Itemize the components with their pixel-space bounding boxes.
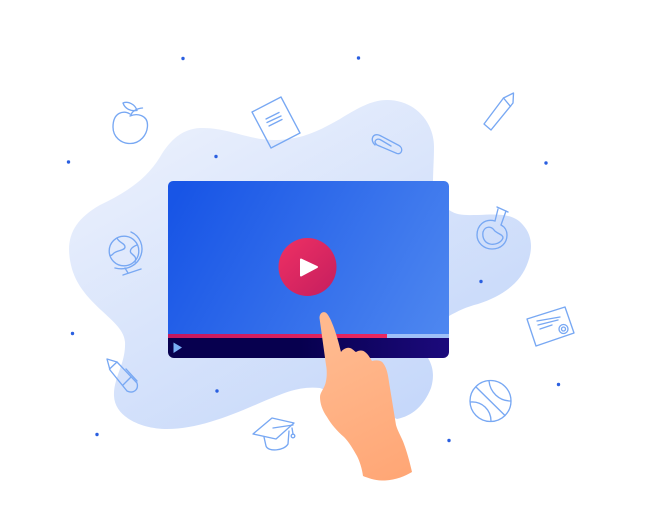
icon: paper sheet [252, 97, 300, 148]
control bar [168, 338, 449, 358]
video player [168, 181, 449, 358]
icon: pencil [484, 93, 514, 130]
icon: certificate [527, 307, 574, 346]
icon: globe [109, 232, 142, 275]
decorative dots [67, 57, 560, 442]
progress bar [168, 334, 387, 338]
progress track [387, 334, 449, 338]
icon: graduation cap [253, 418, 295, 450]
icon: paperclip [372, 135, 402, 154]
screen [168, 181, 449, 340]
small play icon [174, 342, 182, 353]
icon: basketball [470, 380, 511, 422]
icon: flask [477, 207, 508, 249]
icon: apple [113, 102, 148, 144]
background blob [69, 100, 531, 429]
hand pointer [320, 312, 412, 481]
play button [278, 238, 336, 296]
icon: pen [107, 359, 137, 392]
